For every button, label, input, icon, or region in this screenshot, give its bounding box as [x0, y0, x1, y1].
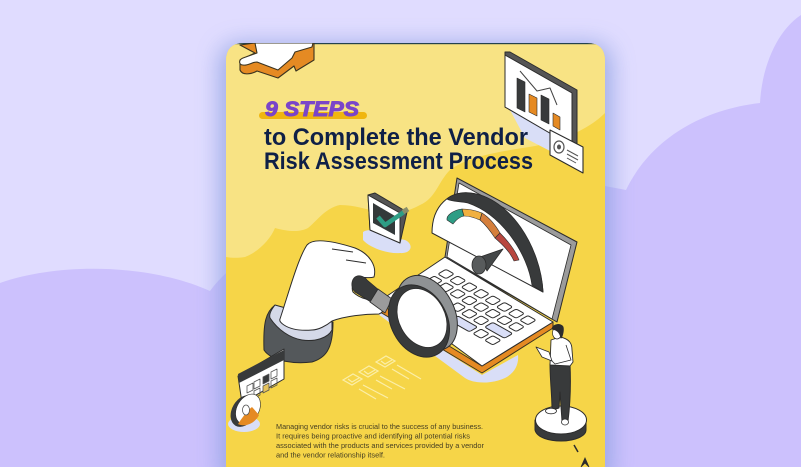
arrow fragment at the bottom	[574, 445, 589, 467]
text block: intro paragraph: associated with the products and services provided by a vendor	[276, 441, 485, 450]
heading: 9 steps	[259, 101, 367, 119]
text block: intro paragraph	[276, 422, 485, 460]
lens rim	[398, 274, 458, 350]
platform	[535, 420, 586, 441]
bars	[517, 78, 560, 130]
heading: title	[264, 128, 532, 169]
head	[552, 330, 560, 340]
text block: intro paragraph: Managing vendor risks is crucial to the success of any business.	[276, 422, 483, 431]
gauge	[432, 193, 543, 292]
keyboard deck	[387, 257, 553, 366]
light yellow cloud backdrop	[226, 43, 605, 258]
illustration: person on platform	[535, 325, 586, 441]
heading: 9 steps: 9 STEPS	[265, 98, 359, 121]
checklist marks on the desk	[343, 356, 421, 399]
icon: small info card	[550, 130, 583, 173]
legs	[550, 364, 570, 421]
trend line	[520, 71, 557, 105]
card shadow	[220, 44, 611, 467]
icon: monitor with bar chart	[505, 52, 577, 152]
heading: title: to Complete the Vendor	[264, 124, 528, 151]
text block: intro paragraph: It requires being proactive and identifying all potential risks	[276, 432, 470, 440]
laptop base	[380, 306, 553, 373]
screen	[445, 178, 577, 322]
keys	[430, 269, 536, 345]
icon: pie chart	[228, 394, 261, 432]
illustration: gloved hand with magnifier	[264, 241, 470, 368]
text block: intro paragraph: and the vendor relationship itself.	[276, 450, 385, 460]
handle	[352, 276, 380, 302]
card	[225, 43, 605, 467]
heading: title: Risk Assessment Process	[264, 148, 533, 175]
needle	[480, 249, 503, 271]
glove	[280, 241, 383, 330]
cuff	[264, 305, 333, 363]
tablet	[536, 347, 552, 361]
illustration: laptop	[378, 178, 577, 383]
torso	[550, 337, 573, 366]
icon: checkbox	[363, 193, 411, 253]
icon: calendar	[238, 349, 284, 403]
icon: puzzle piece	[240, 43, 314, 78]
